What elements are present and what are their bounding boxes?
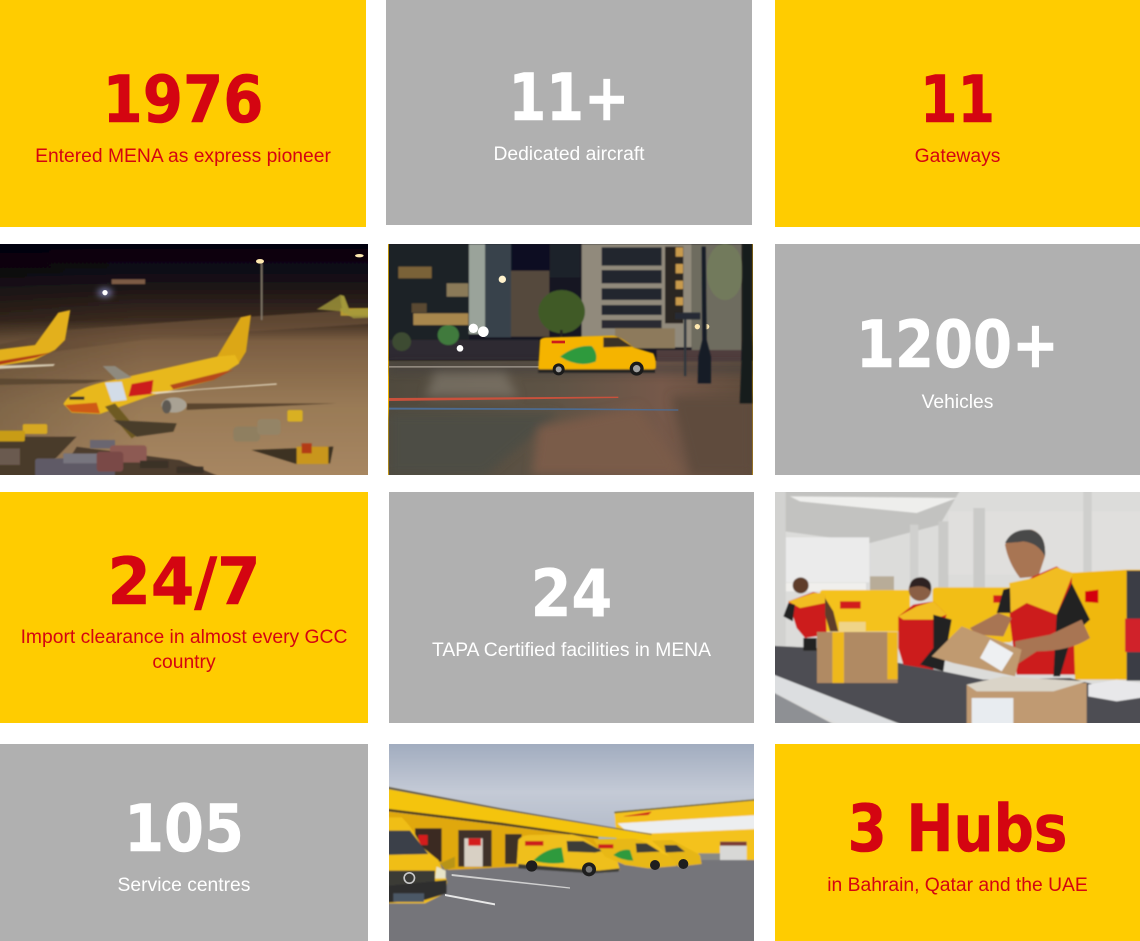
main plane (217, 315, 251, 364)
canopy (379, 785, 652, 840)
box in conveyor (817, 632, 898, 683)
cargo (35, 458, 115, 482)
building right (614, 798, 764, 860)
dock wall (379, 810, 598, 870)
panel: vehicles (775, 244, 1140, 475)
box held (932, 626, 1022, 676)
wet ground tones (389, 365, 752, 475)
van 1 (517, 834, 620, 873)
panel: 3 hubs (775, 744, 1140, 941)
street lights (499, 276, 506, 283)
label: vehicles: Vehicles (922, 392, 993, 413)
distant lights (112, 279, 145, 284)
label: dedicated aircraft: Dedicated aircraft (493, 144, 645, 165)
label: gateways: Gateways (915, 146, 1000, 167)
person right (1005, 530, 1045, 578)
heading: 3 Hubs: 3 Hubs (848, 792, 1067, 866)
heading: 1976: 1976 (102, 62, 264, 138)
trees (538, 290, 585, 333)
panel: dedicated aircraft (386, 0, 752, 225)
ceiling and walls (785, 485, 963, 543)
panel: gateways (775, 0, 1140, 227)
street level (389, 340, 539, 360)
label: service centres: Service centres (118, 875, 250, 896)
person left (793, 577, 809, 593)
van 2 (593, 839, 677, 868)
light trails (389, 397, 618, 401)
panel: TAPA certified facilities (389, 492, 754, 723)
panel: service centres (0, 744, 368, 941)
vans (820, 590, 910, 632)
heading: 24: 24 (531, 556, 612, 632)
conveyor (765, 645, 1140, 733)
heading: 105: 105 (124, 792, 244, 866)
foreground (967, 683, 1087, 733)
heading: 11: 11 (920, 62, 995, 138)
photo: DHL staff sorting parcels on a conveyor (775, 492, 1140, 723)
stairs (105, 403, 140, 438)
far plane (317, 295, 378, 318)
buildings (389, 244, 469, 344)
heading: 11+: 11+ (508, 60, 629, 136)
label: hub locations: in Bahrain, Qatar and the UAE (827, 875, 1088, 896)
van (538, 336, 656, 372)
photo: DHL vans at a service centre (389, 744, 754, 941)
front van (379, 817, 447, 903)
person middle (909, 578, 931, 601)
label: import clearance: Import clearance in almost every GCC country (21, 627, 347, 673)
heading: 1200+: 1200+ (856, 308, 1059, 382)
panel: 1976 entered MENA (0, 0, 366, 227)
photo: DHL electric van on a city street at night (388, 244, 753, 475)
heading: 24/7: 24/7 (107, 544, 261, 620)
poles (684, 317, 686, 376)
van 3 (652, 840, 702, 867)
label: entered MENA: Entered MENA as express pioneer (35, 146, 331, 167)
label: TAPA certified: TAPA Certified facilities in MENA (432, 640, 711, 661)
left plane tail (0, 310, 70, 367)
ground vehicles (23, 424, 47, 434)
photo: aircraft at night on the apron (0, 244, 368, 475)
panel: import clearance (0, 492, 368, 723)
